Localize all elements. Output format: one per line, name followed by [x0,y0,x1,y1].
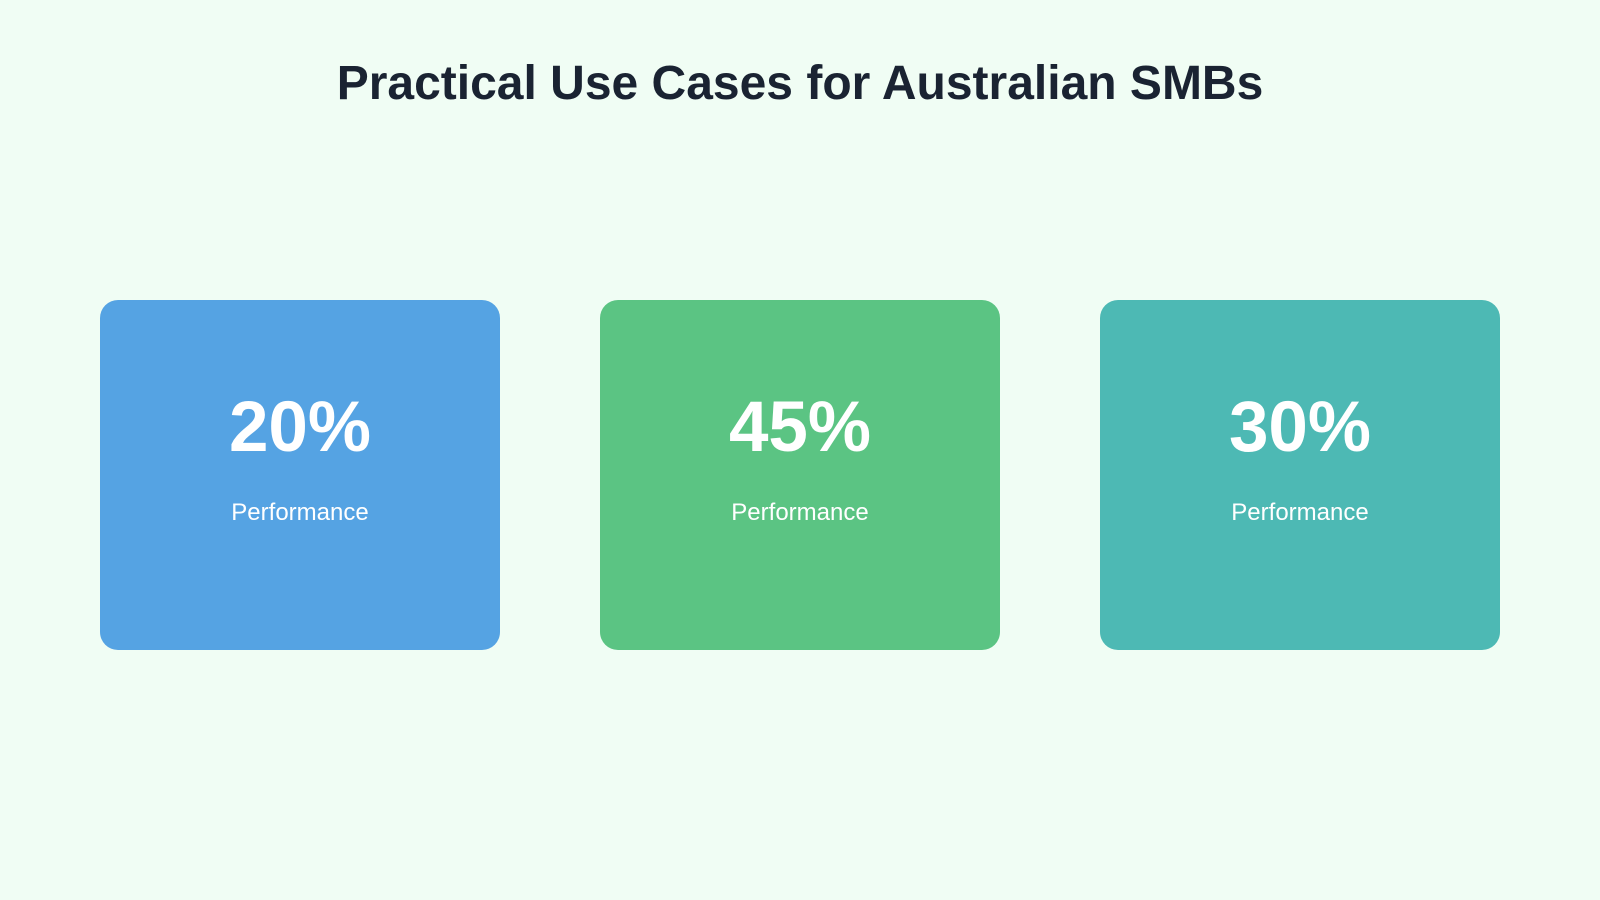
stat: 30%: 30% [1229,388,1371,467]
stat: 20%: 20% [229,388,371,467]
panel: card 2 [600,300,1000,650]
panel: card 3 [1100,300,1500,650]
label: performance: Performance [1231,499,1369,526]
stat: 45%: 45% [729,388,871,467]
label: performance: Performance [731,499,869,526]
panel: card 1 [100,300,500,650]
label: performance: Performance [231,499,369,526]
title: Practical Use Cases for Australian SMBs [337,57,1263,110]
